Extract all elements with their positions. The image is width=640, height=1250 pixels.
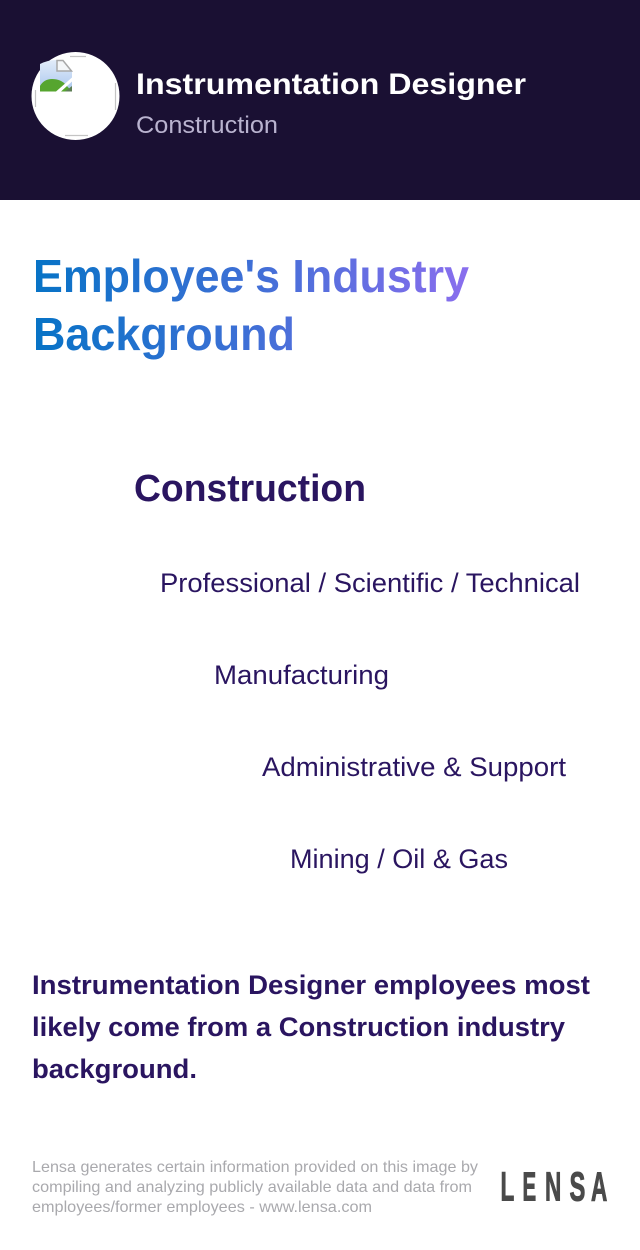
panel: header — [0, 0, 640, 200]
logo: LENSA: E — [522, 1164, 536, 1209]
logo: LENSA: N — [545, 1165, 561, 1210]
logo: LENSA: S — [570, 1165, 585, 1210]
industry rank 5: Mining / Oil & Gas — [290, 844, 508, 874]
footer disclaimer: employees/former employees - www.lensa.com — [32, 1199, 372, 1216]
heading: Employee's Industry — [33, 250, 469, 302]
summary text — [32, 970, 590, 1084]
industry rank 2: Professional / Scientific / Technical — [160, 568, 580, 598]
icon: avatar circle with broken image — [32, 52, 120, 140]
heading — [33, 250, 469, 360]
summary text: Instrumentation Designer employees most — [32, 970, 590, 1000]
logo: LENSA: A — [591, 1165, 607, 1210]
job industry subtitle: Construction — [136, 112, 278, 139]
logo: LENSA: L — [500, 1165, 514, 1210]
top industry: Construction — [134, 468, 366, 510]
heading: Background — [33, 308, 295, 360]
chart: ranked industry list — [134, 468, 580, 874]
summary text: background. — [32, 1054, 197, 1084]
logo: LENSA — [500, 1164, 607, 1210]
job title: Instrumentation Designer — [136, 68, 526, 101]
industry rank 4: Administrative & Support — [262, 752, 567, 782]
footer disclaimer — [32, 1159, 478, 1216]
summary text: likely come from a Construction industry — [32, 1012, 565, 1042]
industry rank 3: Manufacturing — [214, 660, 389, 690]
footer disclaimer: Lensa generates certain information provided on this image by — [32, 1159, 478, 1176]
footer disclaimer: compiling and analyzing publicly available data and data from — [32, 1179, 472, 1196]
